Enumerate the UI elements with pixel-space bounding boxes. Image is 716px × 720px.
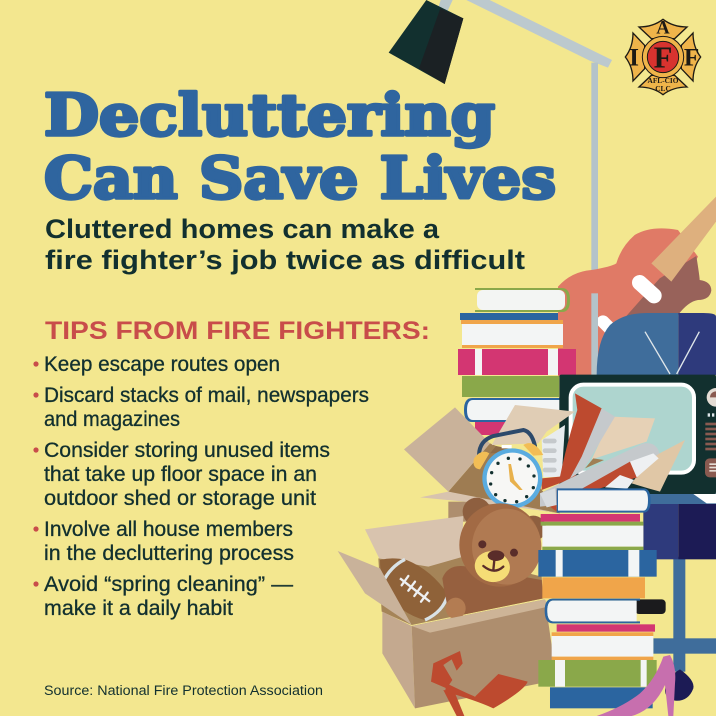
book: blue xyxy=(538,550,657,577)
title xyxy=(44,82,556,212)
tip 2: and magazines xyxy=(44,408,180,431)
tip 4 xyxy=(33,518,294,565)
book: pink xyxy=(458,349,576,375)
sneaker upright xyxy=(542,393,615,490)
book: green xyxy=(538,660,657,687)
illustration: upper book stack xyxy=(458,288,576,435)
tip 3: that take up floor space in an xyxy=(44,463,317,486)
illustration: back box with shoes and clock xyxy=(404,393,685,522)
subtitle xyxy=(45,214,525,275)
football xyxy=(380,558,448,621)
illustration: lower book stack xyxy=(538,488,675,716)
tip 1: Keep escape routes open xyxy=(44,353,280,376)
box flap inner xyxy=(492,405,575,445)
tip 2 xyxy=(33,384,369,431)
cardboard box body xyxy=(382,599,557,708)
sneaker lying xyxy=(540,443,659,512)
box flap right xyxy=(592,417,655,459)
tip 3: Consider storing unused items xyxy=(44,439,330,462)
logo: IAFF emblem xyxy=(625,18,701,95)
alarm clock xyxy=(473,430,543,508)
illustration: television xyxy=(559,313,716,701)
box left flap xyxy=(338,551,412,625)
subtitle: fire fighter’s job twice as difficult xyxy=(45,245,525,275)
tv dials xyxy=(705,388,716,477)
tv screen xyxy=(571,385,694,473)
book: top white xyxy=(557,488,651,513)
tip 4: in the decluttering process xyxy=(44,542,294,565)
box back flap xyxy=(365,516,463,567)
logo: IAFF emblem: CLC xyxy=(655,84,671,93)
logo: IAFF emblem: AFL-CIO xyxy=(648,76,679,85)
book: white green xyxy=(475,288,570,312)
tip 5: make it a daily habit xyxy=(44,597,233,620)
illustration: guitar xyxy=(558,197,716,377)
tip 2: Discard stacks of mail, newspapers xyxy=(44,384,369,407)
logo: IAFF emblem: F xyxy=(654,41,672,75)
pink high heel xyxy=(597,655,675,716)
logo: IAFF emblem: A xyxy=(656,18,670,39)
tips list xyxy=(33,353,369,620)
heading: tips from fire fighters: TIPS FROM FIRE FIGHTERS: xyxy=(45,317,430,345)
logo: IAFF emblem: I xyxy=(629,44,639,72)
tip 3: outdoor shed or storage unit xyxy=(44,487,316,510)
title: Can Save Lives xyxy=(44,145,556,212)
title: Decluttering xyxy=(44,82,495,149)
tip 5 xyxy=(33,573,293,620)
tip 4: Involve all house members xyxy=(44,518,293,541)
box flap left xyxy=(404,407,490,492)
logo: IAFF emblem: F xyxy=(684,44,699,72)
book: white with black tab xyxy=(545,599,666,623)
teddy bear xyxy=(442,498,546,619)
illustration: front box with bear and football xyxy=(338,498,557,716)
tip 5: Avoid “spring cleaning” — xyxy=(44,573,293,596)
red high heel xyxy=(431,651,528,716)
subtitle: Cluttered homes can make a xyxy=(45,214,440,244)
source note: Source: National Fire Protection Association xyxy=(44,683,323,698)
tip 3 xyxy=(33,439,330,510)
tv antenna dome xyxy=(597,313,716,375)
box front lip xyxy=(420,492,557,513)
tv stand xyxy=(643,493,716,701)
illustration: floor lamp xyxy=(389,0,612,377)
book: white blue xyxy=(464,398,560,422)
